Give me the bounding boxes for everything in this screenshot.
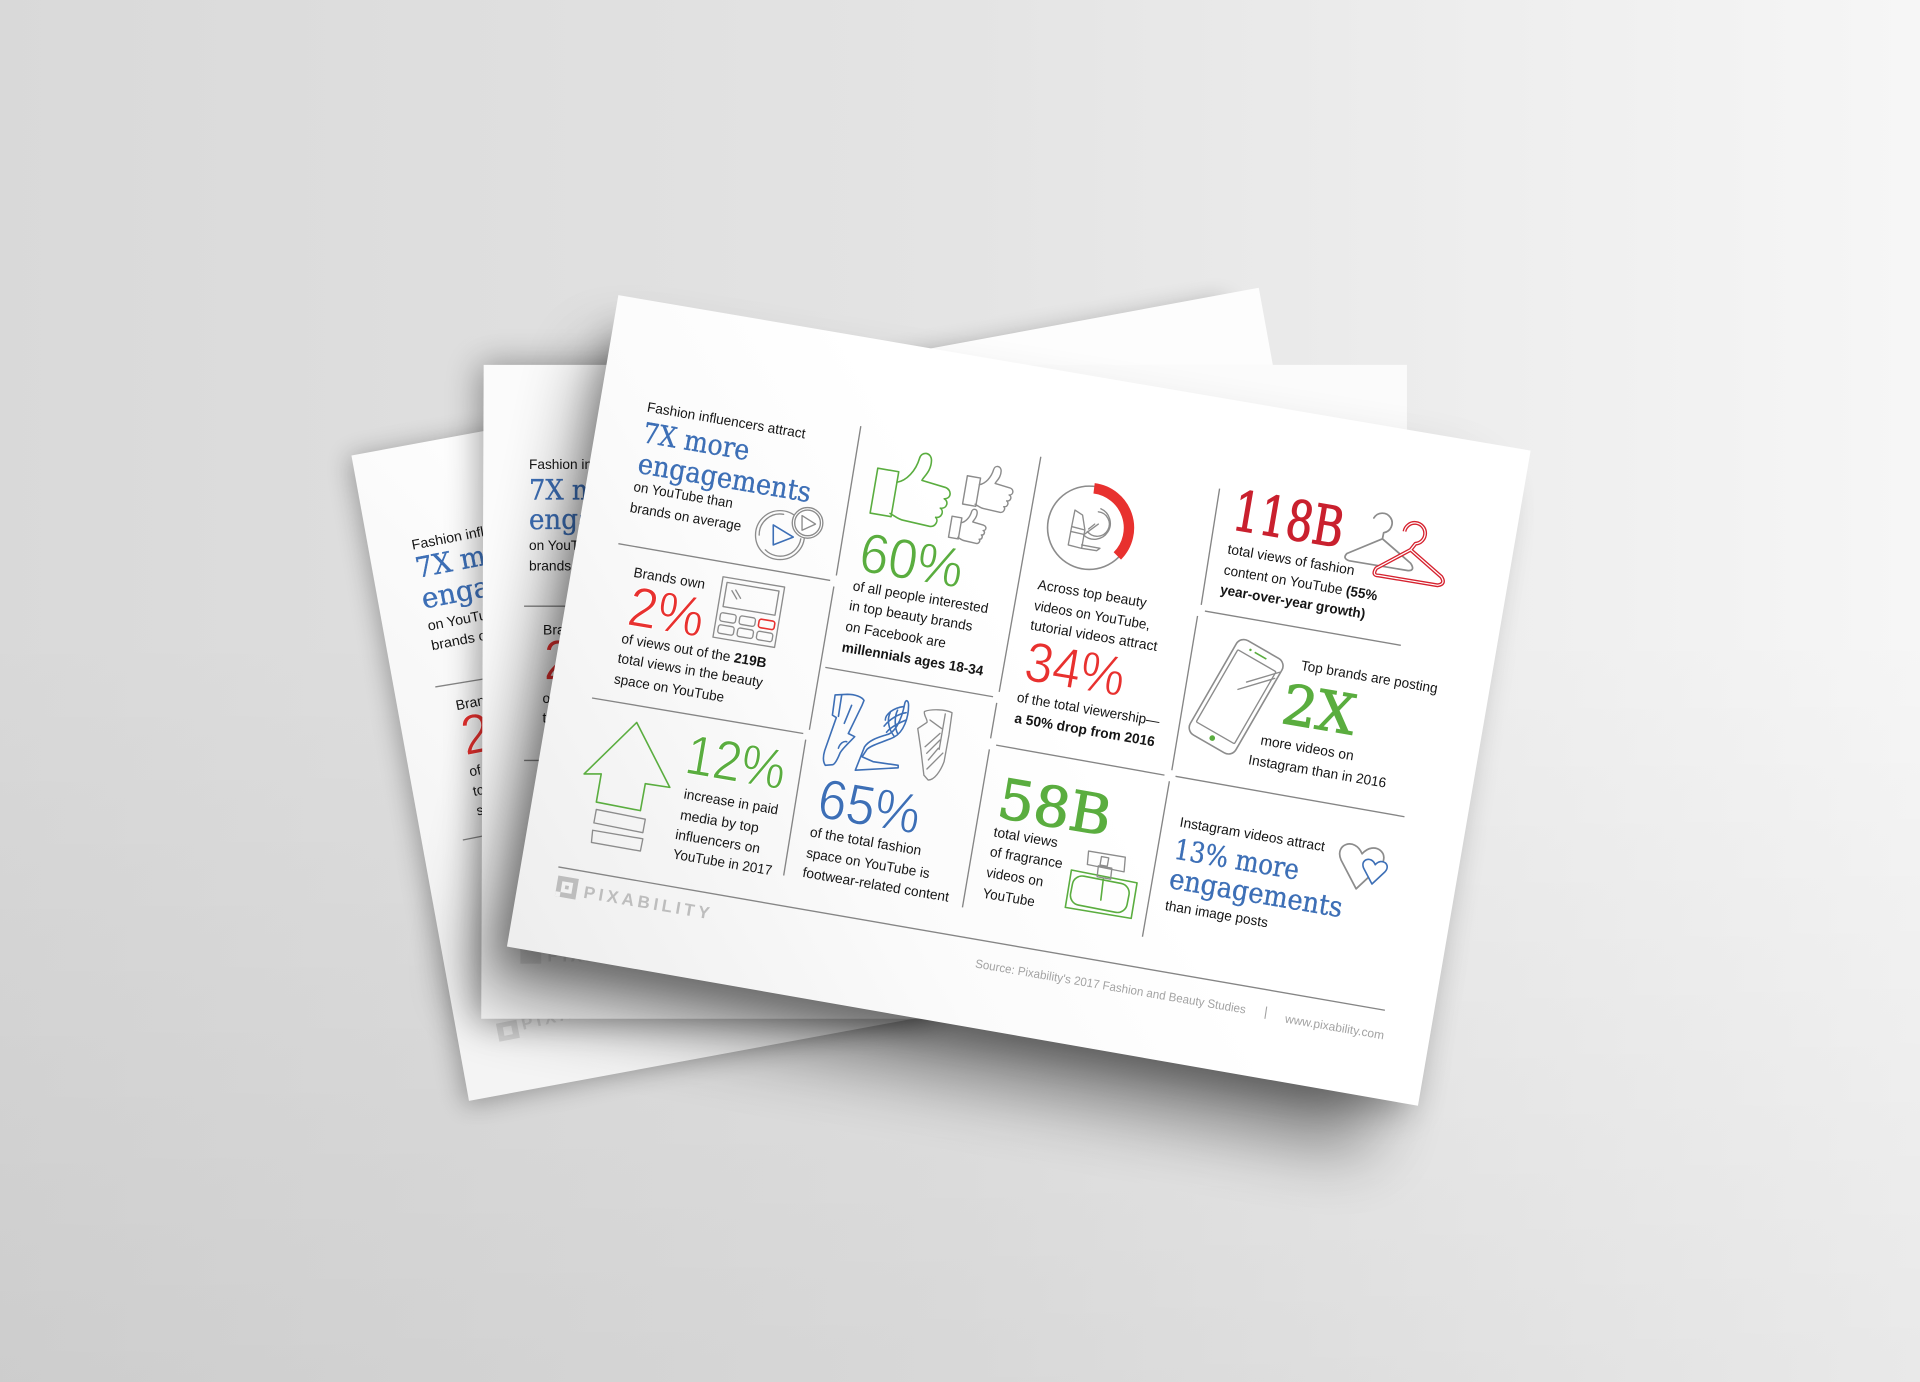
middle sheet: on YouTube than <box>529 537 632 553</box>
middle sheet: total views in the beauty <box>542 709 687 725</box>
icon: green thumbs up <box>870 446 956 529</box>
text: media by top: media by top <box>679 806 760 836</box>
panel: 60% millennials <box>841 446 1017 679</box>
text: of views out of the 219B: of views out of the 219B <box>620 630 768 671</box>
text: in top beauty brands: in top beauty brands <box>848 597 974 634</box>
text: across top beauty: Across top beauty <box>1037 576 1148 611</box>
middle sheet: Brands own <box>543 621 617 637</box>
text: total views in the beauty: total views in the beauty <box>617 650 764 690</box>
panel: 12% increase <box>584 722 791 878</box>
text: brands on average: brands on average <box>629 499 743 534</box>
icon: up arrow <box>584 722 670 851</box>
panel: 34% tutorial videos <box>1013 486 1161 749</box>
panel: 7X more engagements <box>629 399 823 560</box>
icon: donut ring with lipstick and compact <box>1048 486 1131 569</box>
text: Instagram videos attract: Instagram videos attract <box>1179 814 1326 854</box>
icon: smartphone <box>1186 636 1286 757</box>
text: a 50% drop from 2016: a 50% drop from 2016 <box>1013 710 1156 749</box>
footer: source: Source: Pixability's 2017 Fashion and Beauty Studies <box>974 957 1247 1017</box>
panel: 58B fragrance <box>982 766 1137 918</box>
text: influencers on: influencers on <box>674 826 761 856</box>
panel: 2X Instagram videos <box>1186 636 1439 791</box>
text: increase in paid: increase in paid <box>683 786 780 817</box>
text: brands own: Brands own <box>633 564 706 592</box>
stat: 12%: 12% <box>681 722 791 801</box>
stat: 60%: 60% <box>855 520 968 600</box>
icon: sneaker <box>918 710 952 780</box>
text: content on YouTube (55%: content on YouTube (55% <box>1223 561 1379 604</box>
stat: 58B: 58B <box>993 766 1116 849</box>
text: Instagram than in 2016: Instagram than in 2016 <box>1247 751 1388 791</box>
panel: 118B fashion <box>1219 479 1443 622</box>
text: millennials ages 18-34: millennials ages 18-34 <box>841 639 985 679</box>
icon: gray thumbs up large <box>962 462 1017 514</box>
middle sheet: brands on average <box>529 558 644 574</box>
logo: Pixability: PIXABILITY <box>582 882 712 923</box>
icon: gray thumbs up small <box>948 506 989 545</box>
stat: 7X more: 7X more <box>640 416 752 467</box>
icon: calculator panel <box>713 577 785 647</box>
back sheet: Fashion influencers attract <box>410 505 578 553</box>
stat: 118B: 118B <box>1228 479 1349 561</box>
text: fashion influencers attract: Fashion influencers attract <box>646 399 807 441</box>
back sheet: total views in the beauty <box>471 756 616 799</box>
back sheet <box>349 288 1376 1106</box>
divider lines <box>558 426 1404 1010</box>
middle sheet: PIXABILITY <box>547 945 674 965</box>
text: videos on YouTube: videos on YouTube, <box>1033 597 1152 633</box>
panel: 2% of views <box>613 564 785 705</box>
stat: 13% more: 13% more <box>1172 833 1302 887</box>
stat: 2%: 2% <box>624 574 709 649</box>
icon: high heel <box>855 701 909 770</box>
back sheet: PIXABILITY <box>519 986 647 1034</box>
back sheet: 7X more <box>413 530 533 585</box>
middle sheet: of views out of the 219B <box>542 690 689 706</box>
stat: 34%: 34% <box>1020 629 1130 708</box>
icon: hearts <box>1334 842 1388 893</box>
back sheet: space on YouTube <box>475 782 587 818</box>
middle sheet: Fashion influencers attract <box>529 456 690 472</box>
text: of the total fashion: of the total fashion <box>809 824 923 858</box>
panel: 65% footwear <box>802 694 952 905</box>
text: videos on: videos on <box>985 864 1045 889</box>
text: year-over-year growth: year-over-year growth) <box>1219 581 1367 622</box>
text: space on YouTube is: space on YouTube is <box>805 844 931 881</box>
back sheet: Brands own <box>454 683 529 713</box>
icon: flat shoe <box>823 694 864 765</box>
text: total views: total views <box>993 824 1059 850</box>
footer: url: www.pixability.com <box>1283 1011 1385 1042</box>
stat: 65%: 65% <box>813 766 925 846</box>
back sheet: engagements <box>419 547 611 615</box>
icon: perfume bottle <box>1065 851 1137 918</box>
back sheet: brands on average <box>430 615 551 653</box>
footer: separator <box>1265 1007 1267 1019</box>
text: total views of fashion: total views of fashion <box>1226 541 1356 578</box>
front sheet <box>471 295 1531 1151</box>
back sheet: on YouTube than <box>426 597 535 634</box>
stat: engagements: engagements <box>1167 862 1345 924</box>
back sheet: of views out of the 219B <box>468 736 615 779</box>
text: space on YouTube: space on YouTube <box>613 670 726 705</box>
icon: play buttons <box>756 508 823 560</box>
text: on Facebook are: on Facebook are <box>844 618 947 651</box>
text: on YouTube than: on YouTube than <box>633 478 734 511</box>
middle sheet: 7X more <box>529 474 639 507</box>
icon: hangers <box>1345 513 1443 585</box>
text: than image posts: than image posts <box>1164 897 1269 930</box>
text: of all people interested: of all people interested <box>852 577 990 616</box>
back sheet: 2% <box>456 691 542 767</box>
middle sheet: 2% <box>544 629 620 692</box>
stat: 2X: 2X <box>1277 672 1361 748</box>
middle sheet <box>478 365 1407 1021</box>
text: of the total viewership: of the total viewership— <box>1016 689 1161 729</box>
text: YouTube in 2017: YouTube in 2017 <box>672 846 774 878</box>
stat: engagements: engagements <box>636 447 814 509</box>
text: of fragrance: of fragrance <box>989 843 1064 871</box>
text: YouTube: YouTube <box>982 885 1036 909</box>
text: tutorial videos attract: tutorial videos attract <box>1029 617 1159 654</box>
text: more videos on: more videos on <box>1259 732 1355 763</box>
text: footwear-related content: footwear-related content <box>802 864 950 905</box>
middle sheet: engagements <box>529 503 707 536</box>
panel: 13% more engagements <box>1164 814 1388 930</box>
text: top brands are posting: Top brands are posting <box>1300 657 1439 696</box>
